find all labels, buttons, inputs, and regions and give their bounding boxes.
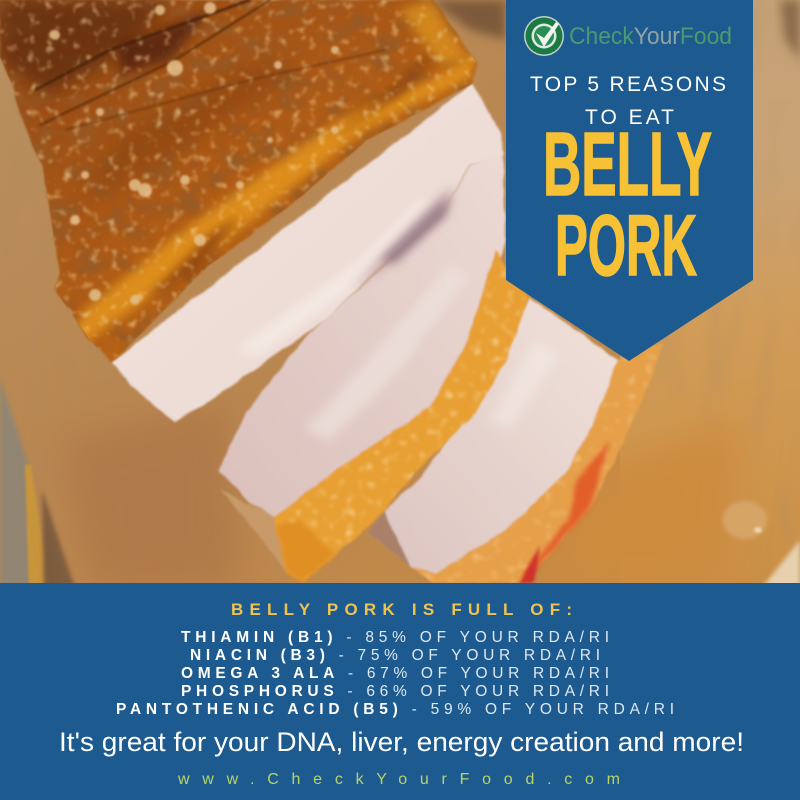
- banner line: top 5 reasons: TOP 5 REASONS: [530, 73, 726, 96]
- banner line: to eat: TO EAT: [585, 106, 674, 129]
- heading: belly pork is full of: BELLY PORK IS FULL OF:: [231, 600, 572, 619]
- slab 1: main joint with crackling and white fat: [0, 0, 505, 422]
- website url: www.CheckYourFood.com: [177, 771, 620, 788]
- slab 2: middle slice with golden crust: [219, 150, 535, 585]
- nutrient: niacin: NIACIN (B3) - 75% OF YOUR RDA/RI: [190, 647, 600, 664]
- panel: nutrients footer: [0, 583, 800, 800]
- tagline: It's great for your DNA, liver, energy creation and more!: [59, 727, 744, 757]
- logo wordmark: CheckYourFood: [569, 23, 732, 50]
- nutrient: thiamin: THIAMIN (B1) - 85% OF YOUR RDA/RI: [181, 629, 609, 646]
- crackling shading and texture: [0, 0, 480, 365]
- nutrient list: [116, 629, 674, 718]
- wooden board background: [0, 0, 800, 590]
- slab 3: rear slice with red crust: [369, 297, 670, 585]
- banner: title ribbon: [506, 0, 753, 361]
- salt granules on crackling: [50, 2, 339, 305]
- photo: roast belly pork on a wooden board: [0, 0, 800, 590]
- nutrient: phosphorus: PHOSPHORUS - 66% OF YOUR RDA/RI: [181, 683, 609, 700]
- heading: pork: PORK: [555, 198, 697, 294]
- nutrient: omega 3: OMEGA 3 ALA - 67% OF YOUR RDA/RI: [181, 665, 609, 682]
- icon: CheckYourFood logo mark: [524, 16, 564, 56]
- nutrient: pantothenic acid: PANTOTHENIC ACID (B5) - 59% OF YOUR RDA/RI: [116, 701, 674, 718]
